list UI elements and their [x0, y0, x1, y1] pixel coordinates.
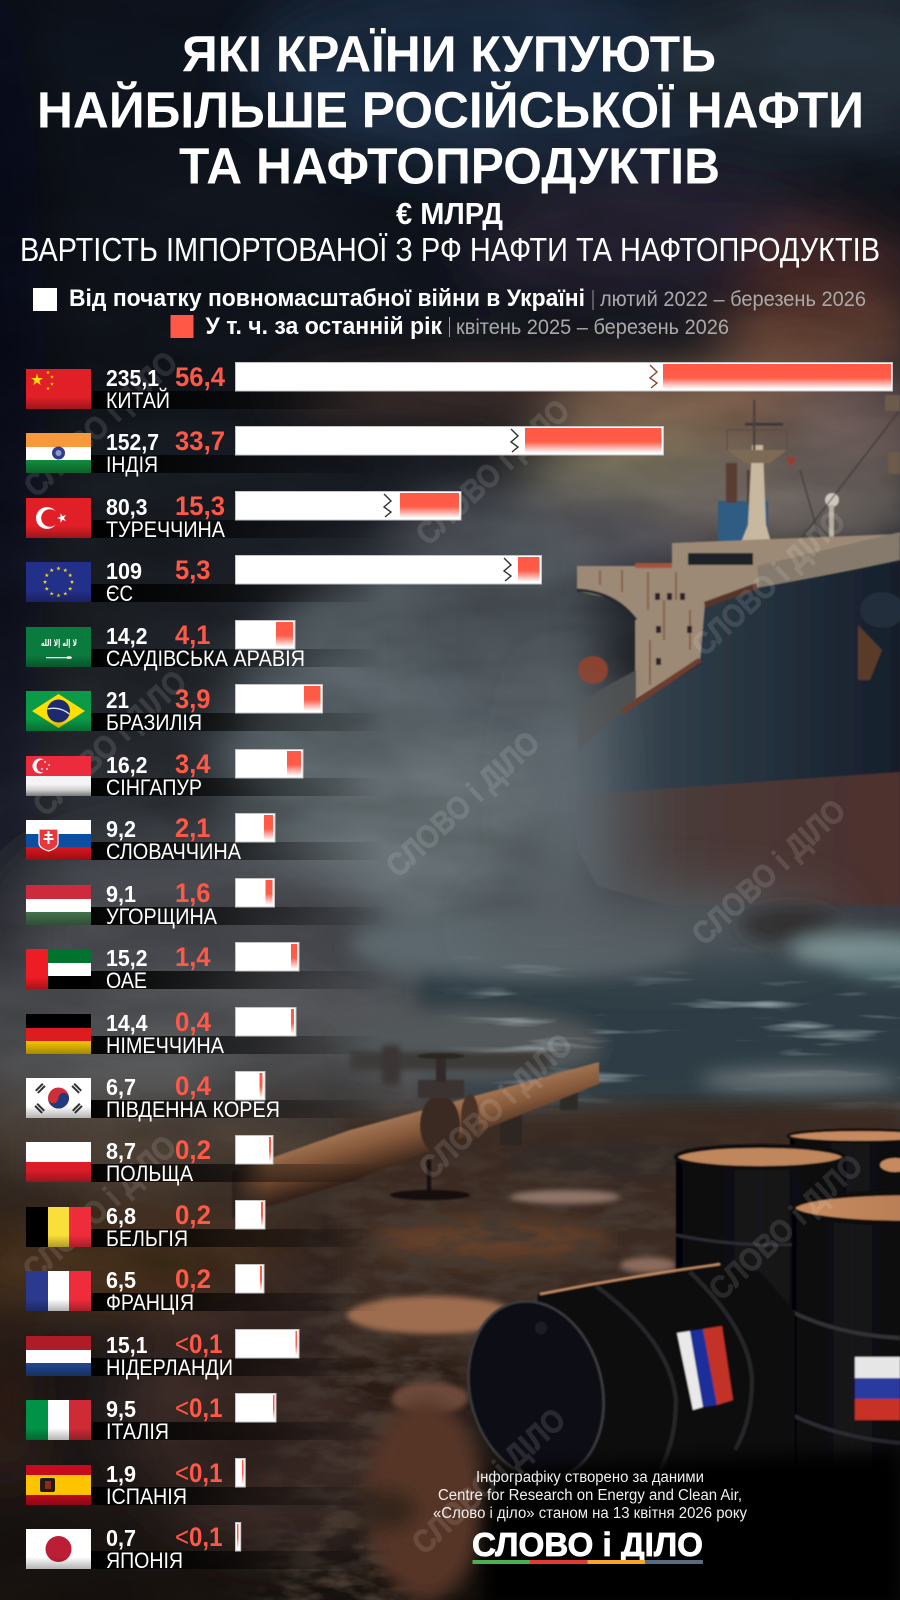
row: UAE	[26, 942, 391, 993]
row: South Korea	[26, 1071, 391, 1122]
unit heading: € МЛРД	[396, 197, 503, 231]
row: Hungary	[26, 878, 391, 929]
bar: Singapore	[236, 750, 303, 778]
background: rough sea	[340, 913, 900, 1110]
row: Saudi Arabia	[26, 620, 391, 671]
bar: India	[236, 426, 664, 455]
row: Slovakia: СЛОВАЧЧИНА	[106, 839, 241, 864]
watermarks	[16, 344, 869, 1561]
flag: Netherlands	[26, 1336, 91, 1376]
row: EU	[26, 555, 542, 606]
row: Saudi Arabia: САУДІВСЬКА АРАВІЯ	[106, 646, 305, 671]
row: Italy: ІТАЛІЯ	[106, 1419, 169, 1444]
bar: Germany	[236, 1008, 296, 1036]
row: Germany: 14,4	[106, 1010, 148, 1036]
flag: Turkey	[26, 498, 91, 538]
title: НАЙБІЛЬШЕ РОСІЙСЬКОЇ НАФТИ	[37, 80, 864, 138]
row: Poland: ПОЛЬЩА	[106, 1161, 193, 1186]
row: Turkey	[26, 491, 461, 542]
flag: India	[26, 433, 91, 473]
watermarks: СЛОВО і ДІЛО	[409, 392, 576, 552]
background: muddy shore and puddles	[220, 1108, 900, 1600]
row: Belgium: 0,2	[175, 1200, 211, 1230]
row: India: ІНДІЯ	[106, 452, 158, 477]
bar: EU	[236, 556, 542, 584]
watermarks: СЛОВО і ДІЛО	[412, 1026, 579, 1186]
watermarks: СЛОВО і ДІЛО	[16, 1128, 183, 1288]
bar: Slovakia	[236, 814, 275, 842]
watermarks: СЛОВО і ДІЛО	[685, 503, 852, 663]
row: Japan: ЯПОНІЯ	[106, 1548, 183, 1573]
row: China: 235,1	[106, 365, 159, 391]
row: Japan: 0,7	[106, 1525, 136, 1551]
row: Italy: 9,5	[106, 1396, 136, 1422]
row: UAE: ОАЕ	[106, 968, 147, 993]
bar: Poland	[236, 1136, 273, 1164]
row: Turkey: 80,3	[106, 494, 148, 520]
row: Netherlands: НІДЕРЛАНДИ	[106, 1355, 233, 1380]
row: India: 33,7	[175, 426, 225, 456]
row: Singapore: СІНГАПУР	[106, 775, 202, 800]
row: France: 0,2	[175, 1264, 211, 1294]
row: Slovakia	[26, 813, 391, 864]
flag: China	[26, 369, 91, 409]
row: Japan	[26, 1522, 391, 1573]
row: Germany: НІМЕЧЧИНА	[106, 1033, 224, 1058]
row: Slovakia: 9,2	[106, 816, 136, 842]
row: Spain	[26, 1458, 391, 1509]
row: Spain: ІСПАНІЯ	[106, 1484, 187, 1509]
bar: Saudi Arabia	[236, 620, 295, 649]
row: EU: 5,3	[175, 555, 210, 585]
row: Brazil	[26, 684, 391, 735]
row: Netherlands: <0,1	[175, 1329, 222, 1359]
bar: Spain	[236, 1458, 245, 1487]
background: black oil barrels with Russian flags	[450, 1130, 900, 1600]
flag: Belgium	[26, 1207, 91, 1247]
row: Japan: <0,1	[175, 1522, 222, 1552]
legend: last year: У т. ч. за останній рік	[206, 313, 443, 340]
watermarks: СЛОВО і ДІЛО	[405, 1401, 572, 1561]
row: Turkey: 15,3	[175, 491, 225, 521]
row: Italy	[26, 1393, 391, 1444]
bar: Brazil	[236, 684, 322, 713]
row: Turkey: ТУРЕЧЧИНА	[106, 517, 225, 542]
flag: Saudi Arabia: لا إله إلا الله	[41, 639, 77, 649]
bar: Italy	[236, 1394, 276, 1422]
source note: Centre for Research on Energy and Clean Air,	[438, 1487, 742, 1504]
row: UAE: 1,4	[175, 942, 210, 972]
row: Brazil: БРАЗИЛІЯ	[106, 710, 202, 735]
flag: France	[26, 1271, 91, 1311]
lying barrel	[450, 1262, 795, 1500]
bar: UAE	[236, 942, 299, 971]
legend: last year: квітень 2025 – березень 2026	[456, 315, 729, 339]
row: Spain: <0,1	[175, 1458, 222, 1488]
row: Singapore	[26, 749, 391, 800]
logo: Слово і Діло: СЛОВО і ДІЛО	[472, 1527, 703, 1564]
row: Saudi Arabia: 14,2	[106, 623, 148, 649]
row: Hungary: УГОРЩИНА	[106, 904, 217, 929]
row: China: КИТАЙ	[106, 388, 170, 413]
watermarks: СЛОВО і ДІЛО	[17, 344, 184, 504]
ship superstructure	[577, 532, 900, 760]
bar: Netherlands	[236, 1330, 299, 1358]
row: India: 152,7	[106, 429, 159, 455]
bar: Belgium	[236, 1200, 265, 1229]
bar: South Korea	[236, 1072, 265, 1100]
row: Germany: 0,4	[175, 1007, 211, 1037]
watermarks: СЛОВО і ДІЛО	[685, 792, 852, 952]
row: China	[26, 362, 892, 413]
row: Slovakia: 2,1	[175, 813, 210, 843]
legend: last year	[170, 313, 729, 340]
row: France	[26, 1264, 391, 1315]
flag: Singapore	[26, 756, 91, 796]
row: South Korea: 0,4	[175, 1071, 211, 1101]
row: Saudi Arabia: 4,1	[175, 620, 210, 650]
flag: South Korea	[26, 1078, 91, 1118]
flag: Brazil	[26, 691, 91, 731]
background: rusty pipeline with valve	[232, 1045, 599, 1218]
flag: Saudi Arabia	[26, 627, 91, 667]
flag: Poland	[26, 1142, 91, 1182]
legend: whole war period	[33, 285, 866, 312]
row: Hungary: 1,6	[175, 878, 210, 908]
watermarks: СЛОВО і ДІЛО	[379, 724, 546, 884]
row: Netherlands: 15,1	[106, 1332, 148, 1358]
flag: Italy	[26, 1400, 91, 1440]
row: Germany	[26, 1007, 391, 1058]
flag: Germany	[26, 1014, 91, 1054]
row: Poland	[26, 1135, 391, 1186]
flag: EU	[26, 562, 91, 602]
row: UAE: 15,2	[106, 945, 148, 971]
row: Hungary: 9,1	[106, 881, 136, 907]
flag: Japan	[26, 1529, 91, 1569]
row: EU: ЄС	[106, 581, 133, 606]
row: Singapore: 16,2	[106, 752, 148, 778]
row: Spain: 1,9	[106, 1461, 136, 1487]
row: Brazil: 21	[106, 687, 129, 713]
watermarks: СЛОВО і ДІЛО	[702, 1147, 869, 1307]
bar: Turkey	[236, 492, 461, 520]
row: India	[26, 426, 664, 477]
source note: Інфографіку створено за даними	[476, 1469, 704, 1486]
row: France: ФРАНЦІЯ	[106, 1290, 194, 1315]
source note	[433, 1469, 747, 1522]
fog over hull	[480, 670, 840, 961]
source note: «Слово і діло» станом на 13 квітня 2026 року	[433, 1505, 747, 1522]
flag: Spain	[26, 1465, 91, 1505]
row: Belgium: БЕЛЬГІЯ	[106, 1226, 188, 1251]
flag: Slovakia	[26, 820, 91, 860]
title: ЯКІ КРАЇНИ КУПУЮТЬ	[182, 26, 716, 82]
row: Belgium: 6,8	[106, 1203, 136, 1229]
row: Poland: 0,2	[175, 1135, 211, 1165]
flag: UAE	[26, 949, 91, 989]
row: Brazil: 3,9	[175, 684, 210, 714]
ship mast and funnel	[718, 395, 900, 546]
breaking wave	[700, 907, 900, 1092]
standing barrel	[792, 1193, 900, 1600]
row: Netherlands	[26, 1329, 391, 1380]
legend: whole war period: лютий 2022 – березень 2026	[600, 287, 866, 311]
row: South Korea: 6,7	[106, 1074, 136, 1100]
bar: China	[236, 362, 892, 391]
back barrels	[676, 1130, 900, 1308]
row: South Korea: ПІВДЕННА КОРЕЯ	[106, 1097, 280, 1122]
bar: France	[236, 1264, 264, 1293]
legend: whole war period: Від початку повномасштабної війни в Україні	[69, 285, 585, 312]
row: EU: 109	[106, 558, 142, 584]
background: rusty tanker ship	[480, 395, 900, 1092]
dark reflection on ground	[480, 1450, 900, 1600]
ship hull	[577, 562, 900, 905]
row: China: 56,4	[175, 362, 225, 392]
watermarks: СЛОВО і ДІЛО	[26, 663, 193, 823]
flag: Hungary	[26, 885, 91, 925]
title	[37, 26, 864, 194]
row: Poland: 8,7	[106, 1138, 136, 1164]
row: Belgium	[26, 1200, 391, 1251]
row: Singapore: 3,4	[175, 749, 210, 779]
title: ТА НАФТОПРОДУКТІВ	[179, 138, 720, 194]
bar: Japan	[236, 1522, 241, 1551]
bar: Hungary	[236, 878, 274, 907]
row: Italy: <0,1	[175, 1393, 222, 1423]
row: France: 6,5	[106, 1267, 136, 1293]
